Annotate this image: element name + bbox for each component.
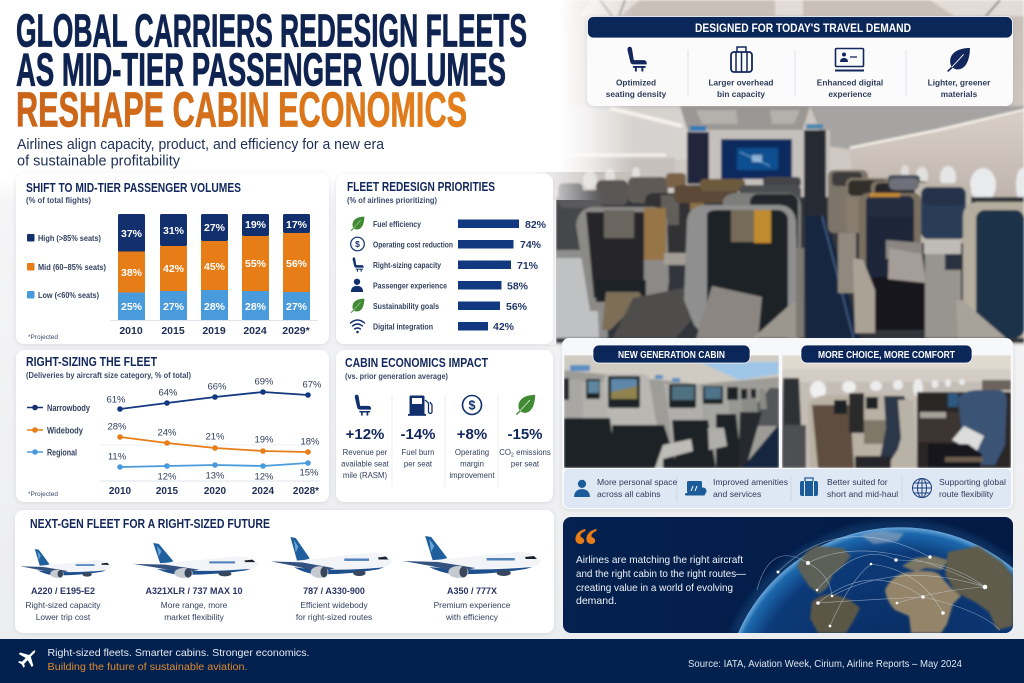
row: right-sizing capacity <box>353 257 539 272</box>
stacked bar chart: 25% <box>121 301 143 313</box>
banner: new generation cabin <box>593 345 750 363</box>
icon: overhead bin bag: Larger overhead <box>708 78 774 88</box>
benefit: amenities <box>685 477 788 499</box>
icon: leaf: materials <box>941 89 978 99</box>
line chart: 24% <box>157 428 177 438</box>
subtitle <box>17 137 385 170</box>
header bar: DESIGNED FOR TODAY'S TRAVEL DEMAND <box>695 21 911 35</box>
line chart: 66% <box>207 382 227 392</box>
metric: RASM: Revenue per <box>343 448 388 457</box>
aircraft: A321XLR: market flexibility <box>164 612 225 622</box>
legend: Mid (60–85% seats) <box>38 262 106 272</box>
source: Source: IATA, Aviation Week, Cirium, Airline Reports – May 2024 <box>688 658 962 670</box>
metric: RASM: +12% <box>346 426 384 443</box>
line chart: 12% <box>254 472 274 482</box>
rear rows right <box>828 170 868 233</box>
line chart: 11% <box>108 452 127 462</box>
panel: right-sizing the fleet <box>16 350 329 502</box>
stacked bar chart: 27% <box>286 301 308 313</box>
row: fuel efficiency <box>351 217 547 231</box>
heading: CABIN ECONOMICS IMPACT <box>345 356 488 370</box>
legend <box>27 233 106 300</box>
quote text: demand. <box>576 595 617 607</box>
benefit: personal space: More personal space <box>597 477 677 487</box>
legend: Widebody <box>47 426 83 436</box>
title <box>16 4 527 138</box>
line chart: 15% <box>299 468 319 478</box>
aircraft: A350: Premium experience <box>434 600 511 610</box>
heading: SHIFT TO MID-TIER PASSENGER VOLUMES <box>26 181 241 195</box>
line chart: 13% <box>205 470 225 482</box>
unit note: (% of total flights) <box>26 196 91 205</box>
rear rows left <box>558 183 583 200</box>
banner: new generation cabin: NEW GENERATION CABIN <box>618 350 725 361</box>
stacked bar chart: 19% <box>245 219 267 231</box>
aircraft: 787 <box>271 537 392 622</box>
legend: Low (<60% seats) <box>38 290 99 300</box>
metric: RASM <box>341 395 390 480</box>
benefit: short and mid-haul <box>800 477 898 499</box>
cabin photo <box>535 0 1024 345</box>
stacked bar chart: 2010 <box>119 325 143 337</box>
line chart: 21% <box>205 432 225 442</box>
photo: more choice, more comfort <box>782 355 1011 468</box>
panel: next-gen fleet <box>15 510 554 633</box>
aircraft: A350 <box>403 536 541 622</box>
quote text: Airlines are matching the right aircraft <box>576 554 743 566</box>
benefits strip <box>564 469 1011 508</box>
icon: seat: seating density <box>606 89 667 99</box>
metric: CO2: CO <box>499 448 511 457</box>
right seat <box>859 193 921 281</box>
aircraft: A220 <box>20 549 112 622</box>
aircraft: A321XLR: A321XLR / 737 MAX 10 <box>145 586 243 596</box>
benefit: short and mid-haul: Better suited for <box>827 477 888 487</box>
row: sustainability goals: Sustainability goals <box>373 301 439 311</box>
unit note: (vs. prior generation average) <box>345 372 448 381</box>
footer message <box>48 647 310 673</box>
metric: CO2: 2 <box>511 452 514 458</box>
quote mark: “ <box>573 517 598 573</box>
row: operating cost reduction: 74% <box>520 239 542 251</box>
unit note: (% of airlines prioritizing) <box>347 196 437 205</box>
footnote: *Projected <box>28 491 58 498</box>
stacked bar chart: 55% <box>245 258 267 270</box>
centre seat <box>684 205 799 341</box>
heading: NEXT-GEN FLEET FOR A RIGHT-SIZED FUTURE <box>30 517 270 531</box>
far-right seat <box>963 202 1024 338</box>
aircraft: A220: Lower trip cost <box>36 612 91 622</box>
metric: operating margin: margin <box>460 460 484 468</box>
benefit: route flexibility: Supporting global <box>939 477 1006 487</box>
benefit: amenities: Improved amenities <box>713 477 788 487</box>
row: operating cost reduction: $ <box>355 239 360 249</box>
stacked bar chart: 17% <box>286 219 308 231</box>
row: sustainability goals <box>351 299 528 313</box>
aircraft: A220: Right-sized capacity <box>26 600 101 610</box>
row: right-sizing capacity: Right-sizing capacity <box>373 260 441 270</box>
panel: cabin economics impact <box>336 350 553 502</box>
heading: FLEET REDESIGN PRIORITIES <box>347 180 495 194</box>
front bulkhead and screen <box>721 139 792 179</box>
line chart: 2024 <box>252 486 275 497</box>
aircraft: 787: for right-sized routes <box>296 612 372 622</box>
aisle <box>805 216 862 341</box>
aircraft: 787: Efficient widebody <box>300 600 368 610</box>
icon: seat <box>606 47 667 99</box>
metric: operating margin: $ <box>469 398 476 412</box>
metric: operating margin <box>449 396 495 480</box>
icon: leaf: Lighter, greener <box>928 78 991 88</box>
fades <box>535 0 560 172</box>
panel: cabin comparison <box>562 338 1013 509</box>
stacked bar chart: 56% <box>286 258 308 270</box>
panel: designed for today's travel demand <box>587 16 1013 106</box>
stacked bar chart: 28% <box>245 301 267 313</box>
legend: Narrowbody <box>47 403 90 413</box>
aircraft: 787: 787 / A330-900 <box>303 586 365 596</box>
metric: fuel burn: Fuel burn <box>402 448 434 457</box>
stacked bar chart: 38% <box>121 267 143 279</box>
globe illustration <box>730 520 1013 633</box>
line chart: 2020 <box>204 486 227 497</box>
line chart: 2015 <box>156 486 179 497</box>
aircraft: A321XLR: More range, more <box>161 600 228 610</box>
quote text <box>576 554 746 607</box>
benefit: personal space <box>574 477 677 499</box>
seat zone base <box>556 197 1024 343</box>
legend: High (>85% seats) <box>38 233 101 243</box>
stacked bar chart: 27% <box>163 301 185 313</box>
row: passenger experience <box>351 279 529 292</box>
icon: digital screen <box>817 48 883 99</box>
stacked bar chart: 45% <box>204 261 226 273</box>
line chart: 2028* <box>293 486 319 497</box>
row: digital integration: Digital integration <box>373 322 433 332</box>
panel: quote <box>563 517 1013 633</box>
footer message: Right-sized fleets. Smarter cabins. Stronger economics. <box>48 647 310 659</box>
blue seat right <box>915 183 971 243</box>
icon: digital screen: Enhanced digital <box>817 78 883 88</box>
line chart: 19% <box>254 434 274 446</box>
legend: Regional <box>47 448 77 458</box>
icon: plane <box>18 650 36 668</box>
row: operating cost reduction <box>351 237 542 251</box>
line chart <box>100 376 322 497</box>
banner: more choice, more comfort <box>801 345 972 363</box>
metric: CO2: -15% <box>507 426 543 443</box>
metric: RASM: mile (RASM) <box>343 471 387 480</box>
stacked bar chart: 2015 <box>161 325 185 337</box>
far-left console <box>556 250 608 338</box>
banner: more choice, more comfort: MORE CHOICE, MORE COMFORT <box>818 350 955 361</box>
subtitle: of sustainable profitability <box>17 154 181 170</box>
line chart: 61% <box>106 394 126 406</box>
row: passenger experience: 58% <box>507 280 529 292</box>
row: digital integration <box>350 320 515 333</box>
footer band <box>0 639 1024 683</box>
aircraft: A321XLR <box>133 543 259 622</box>
line chart: 12% <box>157 472 177 482</box>
row: fuel efficiency: Fuel efficiency <box>373 219 421 229</box>
footnote: *Projected <box>28 334 58 341</box>
title: AS MID-TIER PASSENGER VOLUMES <box>16 44 506 96</box>
legend <box>27 403 90 458</box>
icon: overhead bin bag: bin capacity <box>717 89 765 99</box>
metric: RASM: available seat <box>341 460 390 468</box>
stacked bar chart: 27% <box>204 222 226 234</box>
title: GLOBAL CARRIERS REDESIGN FLEETS <box>16 4 527 56</box>
metric: CO2: emissions <box>514 448 551 457</box>
row: operating cost reduction: Operating cost reduction <box>373 240 453 250</box>
header bar <box>588 16 1012 38</box>
metric: CO2: per seat <box>511 460 540 468</box>
stacked bar chart: 42% <box>163 263 185 275</box>
benefit: short and mid-haul: short and mid-haul <box>827 489 898 499</box>
stacked bar chart: 2019 <box>202 325 226 337</box>
row: right-sizing capacity: 71% <box>517 260 539 272</box>
stacked bar chart: 2029* <box>282 325 311 337</box>
benefit: route flexibility <box>912 477 1006 499</box>
line chart: 64% <box>158 388 178 398</box>
panel: shift to mid-tier passenger volumes <box>16 173 329 344</box>
line chart: 2010 <box>109 486 132 497</box>
stacked bar chart: 28% <box>204 301 226 313</box>
stacked bar chart <box>110 214 318 337</box>
row: fuel efficiency: 82% <box>525 219 547 231</box>
subtitle: Airlines align capacity, product, and efficiency for a new era <box>17 137 385 153</box>
stacked bar chart: 31% <box>163 225 185 237</box>
unit note: (Deliveries by aircraft size category, % of total) <box>26 371 191 380</box>
aircraft: A350: A350 / 777X <box>447 586 497 596</box>
icon: seat: Optimized <box>616 78 656 88</box>
aircraft: A350: with efficiency <box>445 612 499 622</box>
metric: fuel burn: per seat <box>404 460 433 468</box>
benefit: personal space: across all cabins <box>597 489 661 499</box>
windows <box>970 168 996 202</box>
metric: operating margin: +8% <box>457 426 487 443</box>
line chart: 28% <box>107 422 127 432</box>
stacked bar chart: 37% <box>121 228 143 240</box>
left seat <box>576 207 669 311</box>
line chart: 67% <box>302 380 322 390</box>
photo: new generation cabin <box>564 355 779 468</box>
quote text: creating value in a world of evolving <box>576 582 733 594</box>
metric: fuel burn <box>400 396 436 468</box>
row: sustainability goals: 56% <box>506 301 528 313</box>
stacked bar chart: 2024 <box>243 325 267 337</box>
row: passenger experience: Passenger experience <box>373 280 447 290</box>
heading: RIGHT-SIZING THE FLEET <box>26 355 157 369</box>
panel: fleet redesign priorities <box>336 174 553 344</box>
aircraft: A220: A220 / E195-E2 <box>31 586 95 596</box>
icon: leaf <box>928 48 991 99</box>
metric: fuel burn: -14% <box>400 426 436 443</box>
benefit: amenities: and services <box>713 489 761 499</box>
quote text: and the right cabin to the right routes— <box>576 568 746 580</box>
right console <box>924 240 961 254</box>
line chart: 69% <box>254 376 274 388</box>
footer message: Building the future of sustainable aviation. <box>48 661 247 673</box>
benefit: route flexibility: route flexibility <box>939 489 994 499</box>
line chart: 18% <box>300 436 320 448</box>
metric: operating margin: Operating <box>455 448 489 457</box>
metric: CO2 <box>499 395 551 468</box>
row: digital integration: 42% <box>493 321 515 333</box>
curtains <box>687 132 709 184</box>
title: RESHAPE CABIN ECONOMICS <box>16 84 467 138</box>
icon: overhead bin bag <box>708 47 774 99</box>
metric: operating margin: improvement <box>449 471 495 480</box>
icon: digital screen: experience <box>828 89 872 99</box>
